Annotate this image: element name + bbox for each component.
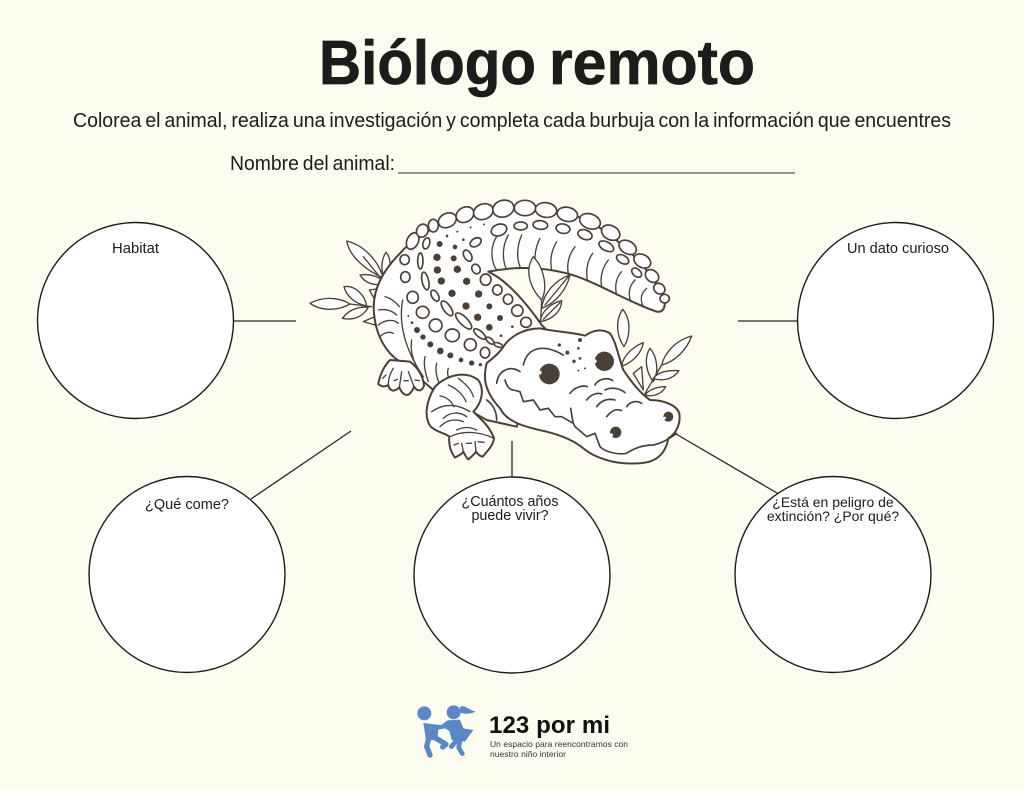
connector lines — [234, 321, 799, 500]
bubble: lifespan: puede vivir? — [471, 508, 549, 524]
head details — [487, 348, 677, 454]
front leg — [427, 375, 494, 459]
bubble: what it eats — [89, 476, 285, 672]
body and tail — [374, 208, 665, 427]
bubble: endangered: ¿Está en peligro de — [772, 494, 894, 510]
logo: 123 por mi: nuestro niño interior — [490, 749, 566, 759]
title: Biólogo — [319, 29, 536, 98]
instructions text: Colorea el animal, realiza una investigación y completa cada burbuja con la información que encuentres — [73, 109, 951, 132]
leaves behind body — [310, 241, 692, 396]
title: remoto — [549, 29, 755, 98]
body spots — [407, 223, 514, 366]
bubble: what it eats: ¿Qué come? — [145, 497, 229, 513]
logo name: 123 por mi — [489, 712, 610, 739]
bubble: habitat: Habitat — [112, 241, 159, 257]
bubble: endangered: extinción? ¿Por qué? — [767, 508, 899, 524]
bubble: lifespan — [414, 477, 610, 673]
bubble: fun fact: Un dato curioso — [847, 241, 949, 257]
logo: 123 por mi — [417, 705, 628, 759]
head — [485, 328, 680, 464]
dorsal scales — [404, 198, 669, 303]
leaves in front of tail — [529, 257, 570, 322]
icon: two children holding hands — [417, 705, 476, 755]
bubble: endangered — [735, 476, 931, 672]
title — [319, 29, 755, 98]
back foot — [378, 360, 424, 395]
eyes, nostrils and head spots — [539, 338, 673, 438]
bubble: fun fact — [798, 222, 994, 418]
animal name field: Nombre del animal: — [230, 152, 395, 175]
bubble: habitat — [38, 222, 234, 418]
tail ribs and plates — [378, 235, 647, 385]
logo tagline: Un espacio para reencontramos con — [490, 739, 628, 749]
bubble: lifespan: ¿Cuántos años — [462, 494, 558, 510]
crocodile illustration — [310, 198, 692, 464]
